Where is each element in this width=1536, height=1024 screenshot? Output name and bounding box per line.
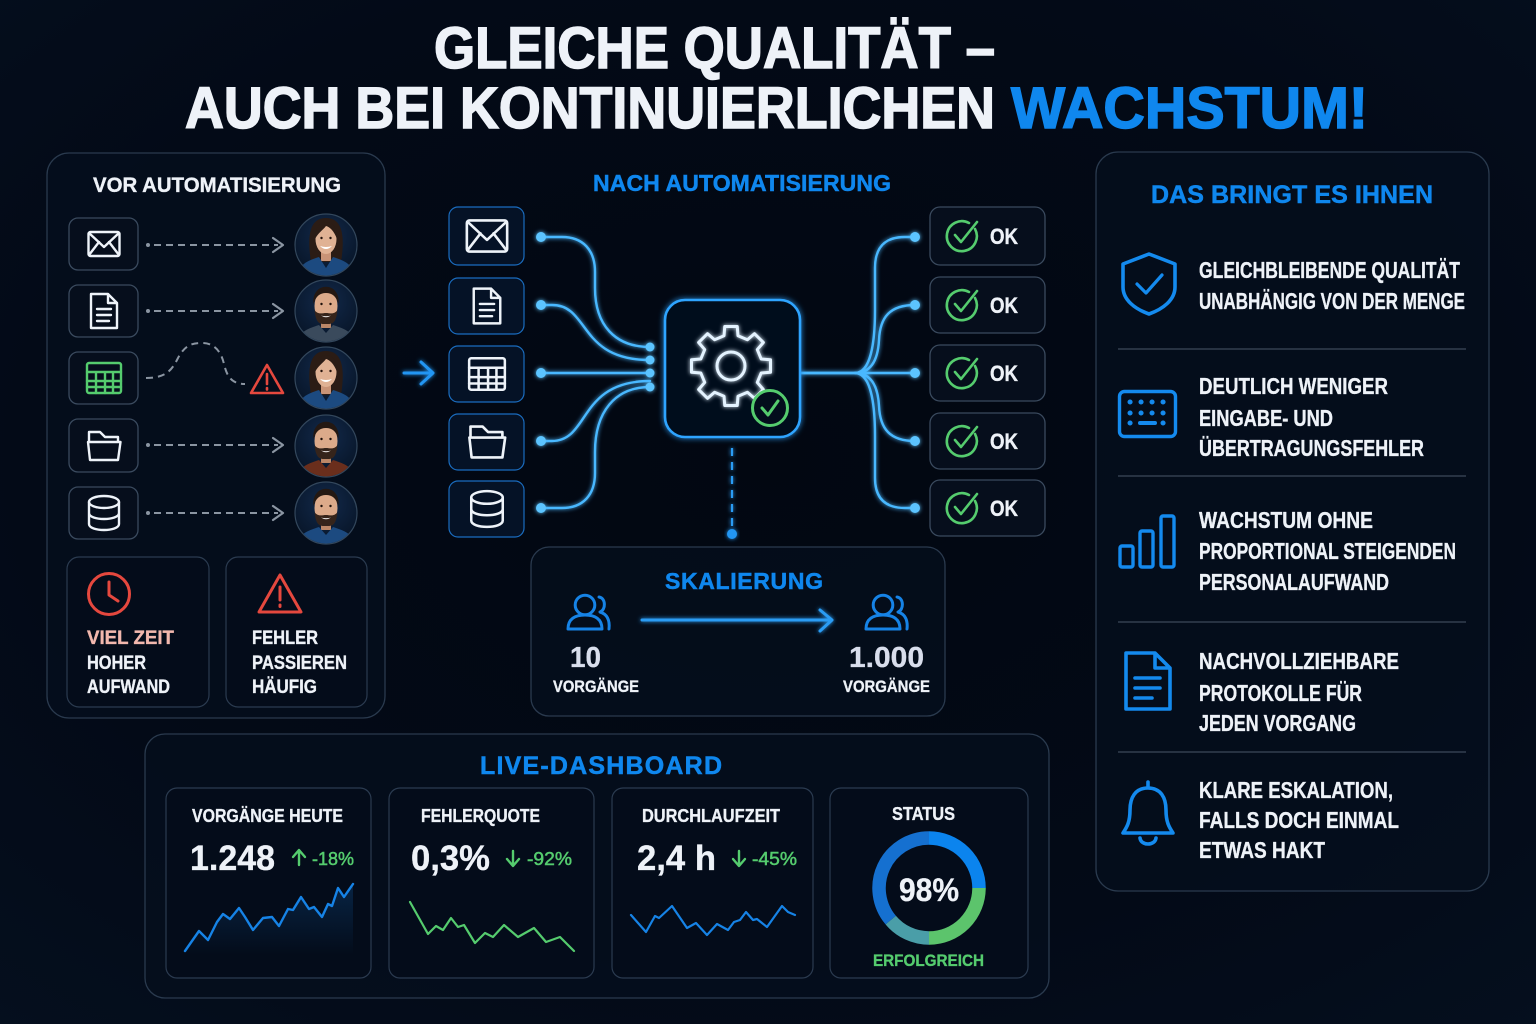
benefit: growth: WACHSTUM OHNE	[1199, 507, 1373, 533]
benefit: protocols	[1126, 648, 1399, 736]
benefit: growth	[1120, 507, 1456, 595]
callout: viel Zeit: VIEL ZEIT	[87, 628, 174, 649]
source: folder	[449, 414, 524, 470]
row: mail to person	[69, 214, 357, 276]
output 3: OK	[990, 361, 1018, 386]
title: AUCH BEI KONTINUIERLICHEN	[185, 76, 995, 141]
output 5: OK	[990, 496, 1018, 521]
source: table	[449, 346, 524, 402]
benefit: growth: PROPORTIONAL STEIGENDEN	[1199, 538, 1456, 564]
heading: nach Automatisierung: NACH AUTOMATISIERUNG	[593, 170, 891, 196]
heading: Live-Dashboard: LIVE-DASHBOARD	[480, 752, 722, 780]
icon: gear	[692, 326, 770, 406]
connection lines: inputs to gear	[536, 232, 654, 513]
callout: viel Zeit	[67, 557, 209, 707]
card: Vorgänge heute: 1.248	[190, 839, 275, 878]
source: database	[449, 481, 524, 537]
output 2	[930, 277, 1045, 333]
title: GLEICHE QUALITÄT –	[434, 16, 995, 81]
heading: benefits: DAS BRINGT ES IHNEN	[1151, 181, 1433, 209]
input sources	[449, 207, 524, 537]
output 3	[930, 345, 1045, 401]
title	[185, 16, 1368, 141]
dashed link to scaling	[727, 448, 737, 539]
label: Vorgänge right: VORGÄNGE	[843, 677, 930, 696]
output 1	[930, 207, 1045, 265]
arrow: scaling	[642, 610, 832, 631]
value: 10: 10	[570, 642, 601, 674]
panel: vor Automatisierung	[47, 153, 385, 718]
card: Status: 98%	[899, 872, 959, 908]
benefit: escalation: KLARE ESKALATION,	[1199, 777, 1393, 803]
card: Status: STATUS	[892, 804, 955, 824]
benefit: quality	[1123, 254, 1465, 314]
panel heading: VOR AUTOMATISIERUNG	[93, 174, 341, 197]
title: WACHSTUM!	[1011, 76, 1368, 141]
panel: Skalierung	[531, 547, 945, 716]
row: spreadsheet with error	[69, 343, 357, 409]
benefit: fewer errors: ÜBERTRAGUNGSFEHLER	[1199, 435, 1424, 461]
callout: Fehler passieren: PASSIEREN	[252, 653, 347, 674]
benefit: protocols: JEDEN VORGANG	[1199, 710, 1356, 736]
card: Fehlerquote: 0,3%	[411, 839, 490, 878]
output 2: OK	[990, 293, 1018, 318]
benefit: escalation	[1123, 777, 1399, 863]
icon: success badge	[752, 390, 788, 426]
benefit: growth: PERSONALAUFWAND	[1199, 569, 1389, 595]
output 4	[930, 413, 1045, 469]
row: document to person	[69, 280, 357, 342]
card: Durchlaufzeit: -45%	[752, 849, 797, 869]
card: Vorgänge heute: -18%	[312, 849, 354, 869]
callout: Fehler passieren	[226, 557, 367, 707]
OK outputs	[930, 207, 1045, 536]
source: document	[449, 278, 524, 334]
benefit: protocols: NACHVOLLZIEHBARE	[1199, 648, 1399, 674]
label: Vorgänge left: VORGÄNGE	[553, 677, 639, 696]
output 1: OK	[990, 224, 1018, 249]
benefit: protocols: PROTOKOLLE FÜR	[1199, 680, 1362, 706]
card: Durchlaufzeit	[612, 788, 813, 978]
card: Durchlaufzeit: DURCHLAUFZEIT	[642, 806, 780, 826]
benefit: fewer errors	[1120, 373, 1424, 461]
source: mail	[449, 207, 524, 265]
callout: viel Zeit: HOHER	[87, 653, 146, 674]
row: folder to person	[69, 415, 357, 477]
callout: viel Zeit: AUFWAND	[87, 677, 170, 698]
card: Durchlaufzeit: 2,4 h	[637, 839, 716, 878]
card: Fehlerquote: FEHLERQUOTE	[421, 806, 540, 826]
central gear box	[665, 300, 800, 437]
card: Status	[830, 788, 1028, 978]
arrow: before to after	[404, 362, 433, 384]
card: Fehlerquote: -92%	[527, 849, 572, 869]
value: 1.000: 1.000	[849, 642, 924, 674]
row: database to person	[69, 482, 357, 544]
callout: Fehler passieren: FEHLER	[252, 628, 318, 649]
benefit: escalation: ETWAS HAKT	[1199, 837, 1325, 863]
benefit: fewer errors: DEUTLICH WENIGER	[1199, 373, 1388, 399]
card: Vorgänge heute: VORGÄNGE HEUTE	[192, 806, 343, 826]
donut chart	[879, 838, 979, 938]
benefit: quality: GLEICHBLEIBENDE QUALITÄT	[1199, 257, 1460, 283]
benefit: escalation: FALLS DOCH EINMAL	[1199, 807, 1399, 833]
heading: Skalierung: SKALIERUNG	[665, 568, 823, 594]
benefit: fewer errors: EINGABE- UND	[1199, 405, 1333, 431]
card: Vorgänge heute	[166, 788, 371, 978]
connection lines: gear to OK	[800, 232, 920, 513]
icon: users large	[866, 595, 907, 629]
card: Fehlerquote	[389, 788, 594, 978]
callout: Fehler passieren: HÄUFIG	[252, 677, 317, 698]
icon: users small	[568, 595, 609, 629]
output 4: OK	[990, 429, 1018, 454]
panel: Das bringt es Ihnen	[1096, 152, 1489, 891]
output 5	[930, 480, 1045, 536]
card: Status: ERFOLGREICH	[873, 951, 984, 970]
panel: Live-Dashboard	[145, 734, 1049, 998]
